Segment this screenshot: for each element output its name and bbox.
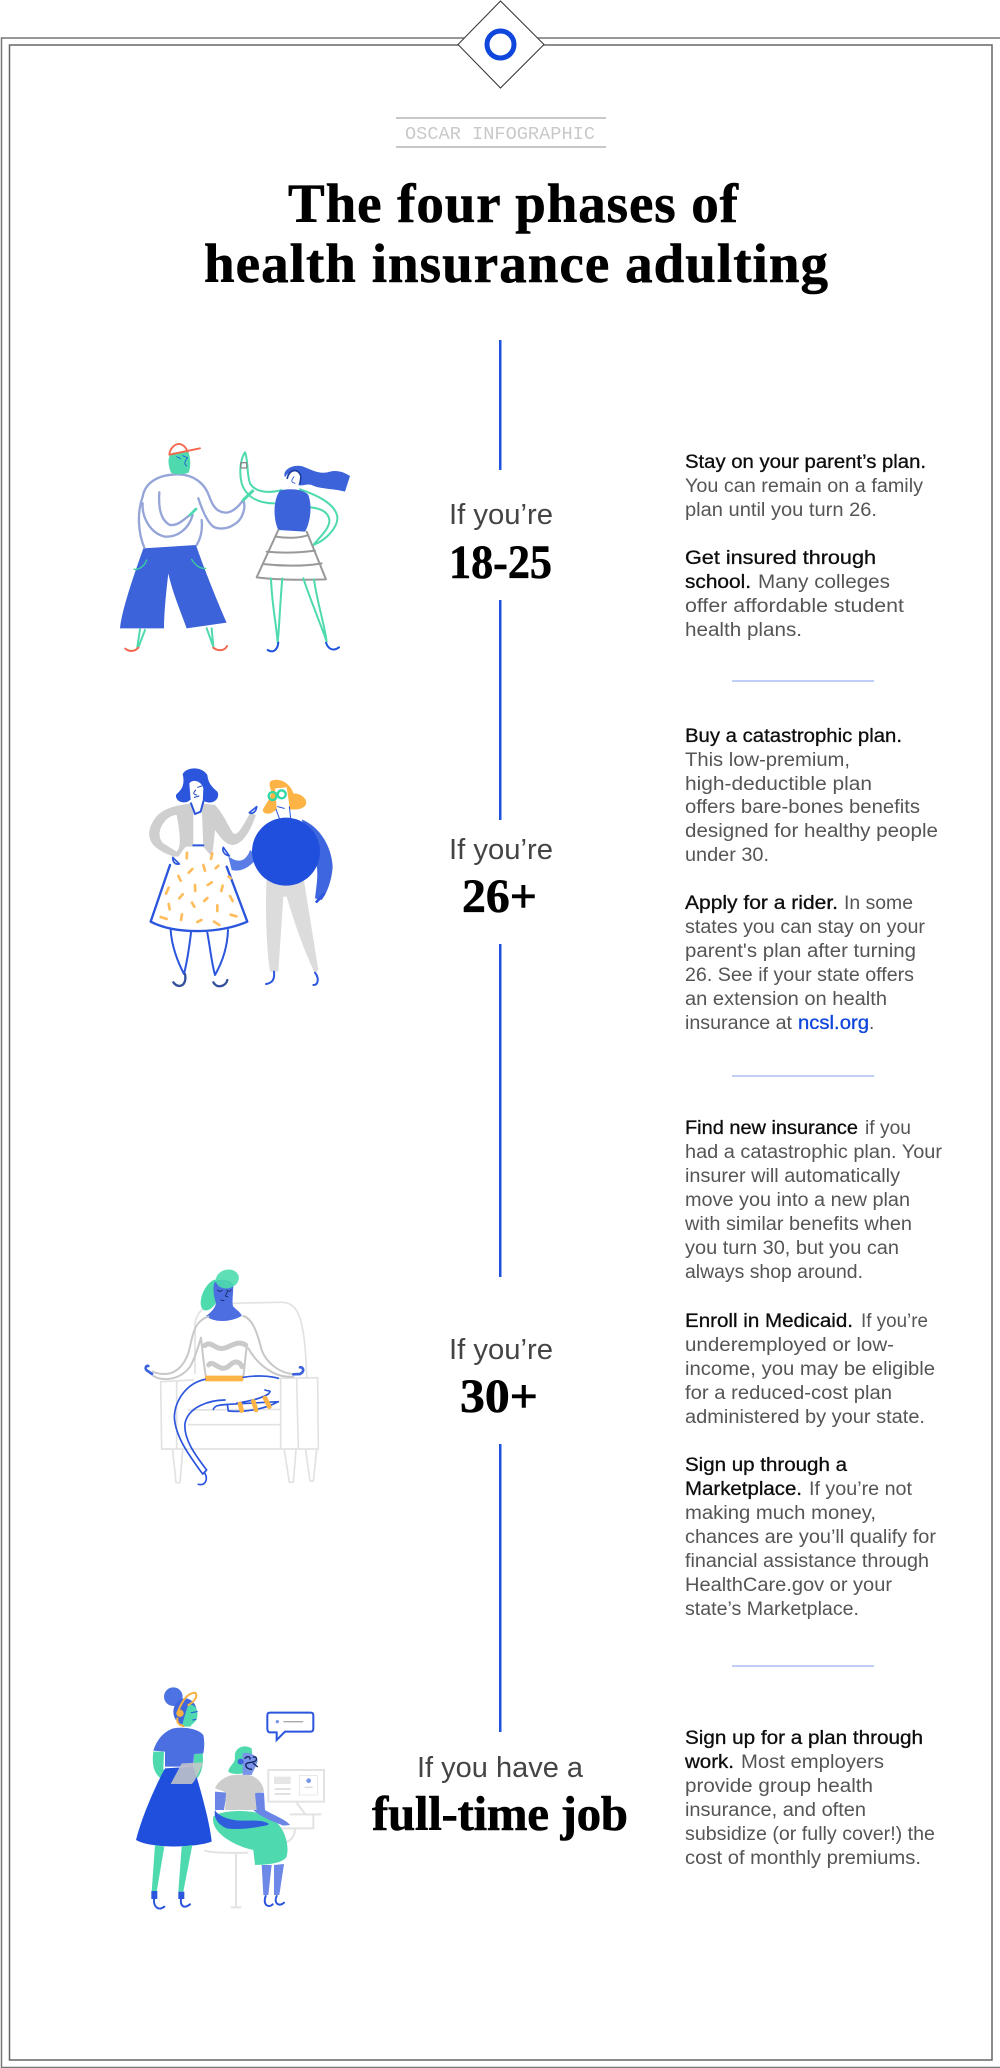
title [204,173,828,294]
phase label: 26+ [449,834,553,923]
text block: 30+ advice: always shop around. [685,1262,863,1283]
title: health insurance adulting [204,233,828,294]
text block: 30+ advice: administered by your state. [685,1407,925,1428]
text block: full-time job advice: Most employers [741,1752,884,1773]
text block: 18-25 advice: You can remain on a family [685,476,924,497]
phase label: full-time job: full-time job [372,1786,628,1841]
text block: 26+ advice: offers bare-bones benefits [685,797,920,818]
text block: 26+ advice: Apply for a rider. [685,893,838,914]
text block: 18-25 advice [685,452,926,641]
text block: 30+ advice: Marketplace. [685,1479,802,1500]
text block: 30+ advice: If you’re [861,1311,928,1332]
text block: 26+ advice: insurance at [685,1013,793,1034]
illustration: two women, age 26+ [149,768,333,986]
text block: 26+ advice: an extension on health [685,989,887,1010]
text block: 30+ advice: had a catastrophic plan. Your [685,1142,943,1163]
text block: 30+ advice: state’s Marketplace. [685,1599,859,1620]
text block: 18-25 advice: plan until you turn 26. [685,500,877,521]
text block: 30+ advice: Sign up through a [685,1455,847,1476]
logo: diamond with blue ring [458,1,544,88]
phase label: 30+: If you’re [449,1334,553,1366]
text block: 30+ advice: financial assistance through [685,1551,929,1572]
center timeline [499,340,502,1732]
text block: 30+ advice: insurer will automatically [685,1166,901,1187]
text block: 26+ advice: ncsl.org [798,1013,869,1034]
phase label: 18-25 [449,499,553,589]
text block: full-time job advice [684,1728,935,1869]
text block: 26+ advice: under 30. [685,845,769,866]
text block: 26+ advice: designed for healthy people [685,821,938,842]
text block: full-time job advice: cost of monthly premiums. [685,1848,921,1869]
phase label: 30+ [449,1334,553,1423]
text block: 18-25 advice: Get insured through [685,548,876,569]
text block: 18-25 advice: health plans. [685,620,802,641]
phase label: full-time job: If you have a [417,1752,584,1784]
text block: 30+ advice: underemployed or low- [685,1335,894,1356]
text block: 18-25 advice: school. [685,572,751,593]
phase label: 26+: 26+ [462,870,537,923]
text block: 30+ advice: you turn 30, but you can [685,1238,899,1259]
text block: full-time job advice: insurance, and often [685,1800,866,1821]
text block: 30+ advice: HealthCare.gov or your [685,1575,893,1596]
text block: 26+ advice: 26. See if your state offers [685,965,914,986]
text block: 26+ advice: Buy a catastrophic plan. [685,726,902,747]
text block: 18-25 advice: offer affordable student [685,596,905,617]
text block: 30+ advice: Find new insurance [685,1118,858,1139]
text block: 30+ advice: if you [865,1118,911,1139]
text block: 18-25 advice: Many colleges [758,572,890,593]
text block: 26+ advice [685,726,938,1034]
text block: 26+ advice: This low-premium, [685,750,850,771]
text block: 30+ advice: chances are you’ll qualify for [685,1527,937,1548]
phase label: 30+: 30+ [460,1370,538,1423]
phase label: full-time job [372,1752,628,1841]
text block: 26+ advice: In some [844,893,913,914]
illustration: meditating woman on chair, age 30+ [146,1267,318,1485]
text block: 30+ advice: If you’re not [809,1479,913,1500]
text block: 30+ advice: with similar benefits when [684,1214,912,1235]
text block: 30+ advice: move you into a new plan [685,1190,910,1211]
text block: full-time job advice: work. [684,1752,734,1773]
title: The four phases of [288,173,739,234]
illustration: office workers, full-time job [136,1687,324,1909]
eyebrow label: OSCAR INFOGRAPHIC [405,125,595,145]
phase label: 18-25: 18-25 [449,536,552,589]
text block: 26+ advice: parent's plan after turning [685,941,916,962]
text block: 26+ advice: states you can stay on your [685,917,926,938]
text block: 30+ advice: Enroll in Medicaid. [685,1311,853,1332]
text block: full-time job advice: Sign up for a plan through [685,1728,923,1749]
text block: 30+ advice: making much money, [685,1503,876,1524]
text block: full-time job advice: provide group health [685,1776,873,1797]
phase label: 26+: If you’re [449,834,553,866]
illustration: high five, ages 18-25 [120,444,350,651]
text block: 26+ advice: high-deductible plan [685,774,872,795]
text block: 26+ advice: . [869,1013,874,1034]
phase label: 18-25: If you’re [449,499,553,531]
text block: full-time job advice: subsidize (or fully cover!) the [685,1824,935,1845]
text block: 30+ advice: income, you may be eligible [685,1359,935,1380]
text block: 30+ advice [684,1118,943,1620]
text block: 30+ advice: for a reduced-cost plan [685,1383,892,1404]
text block: 18-25 advice: Stay on your parent’s plan. [685,452,926,473]
